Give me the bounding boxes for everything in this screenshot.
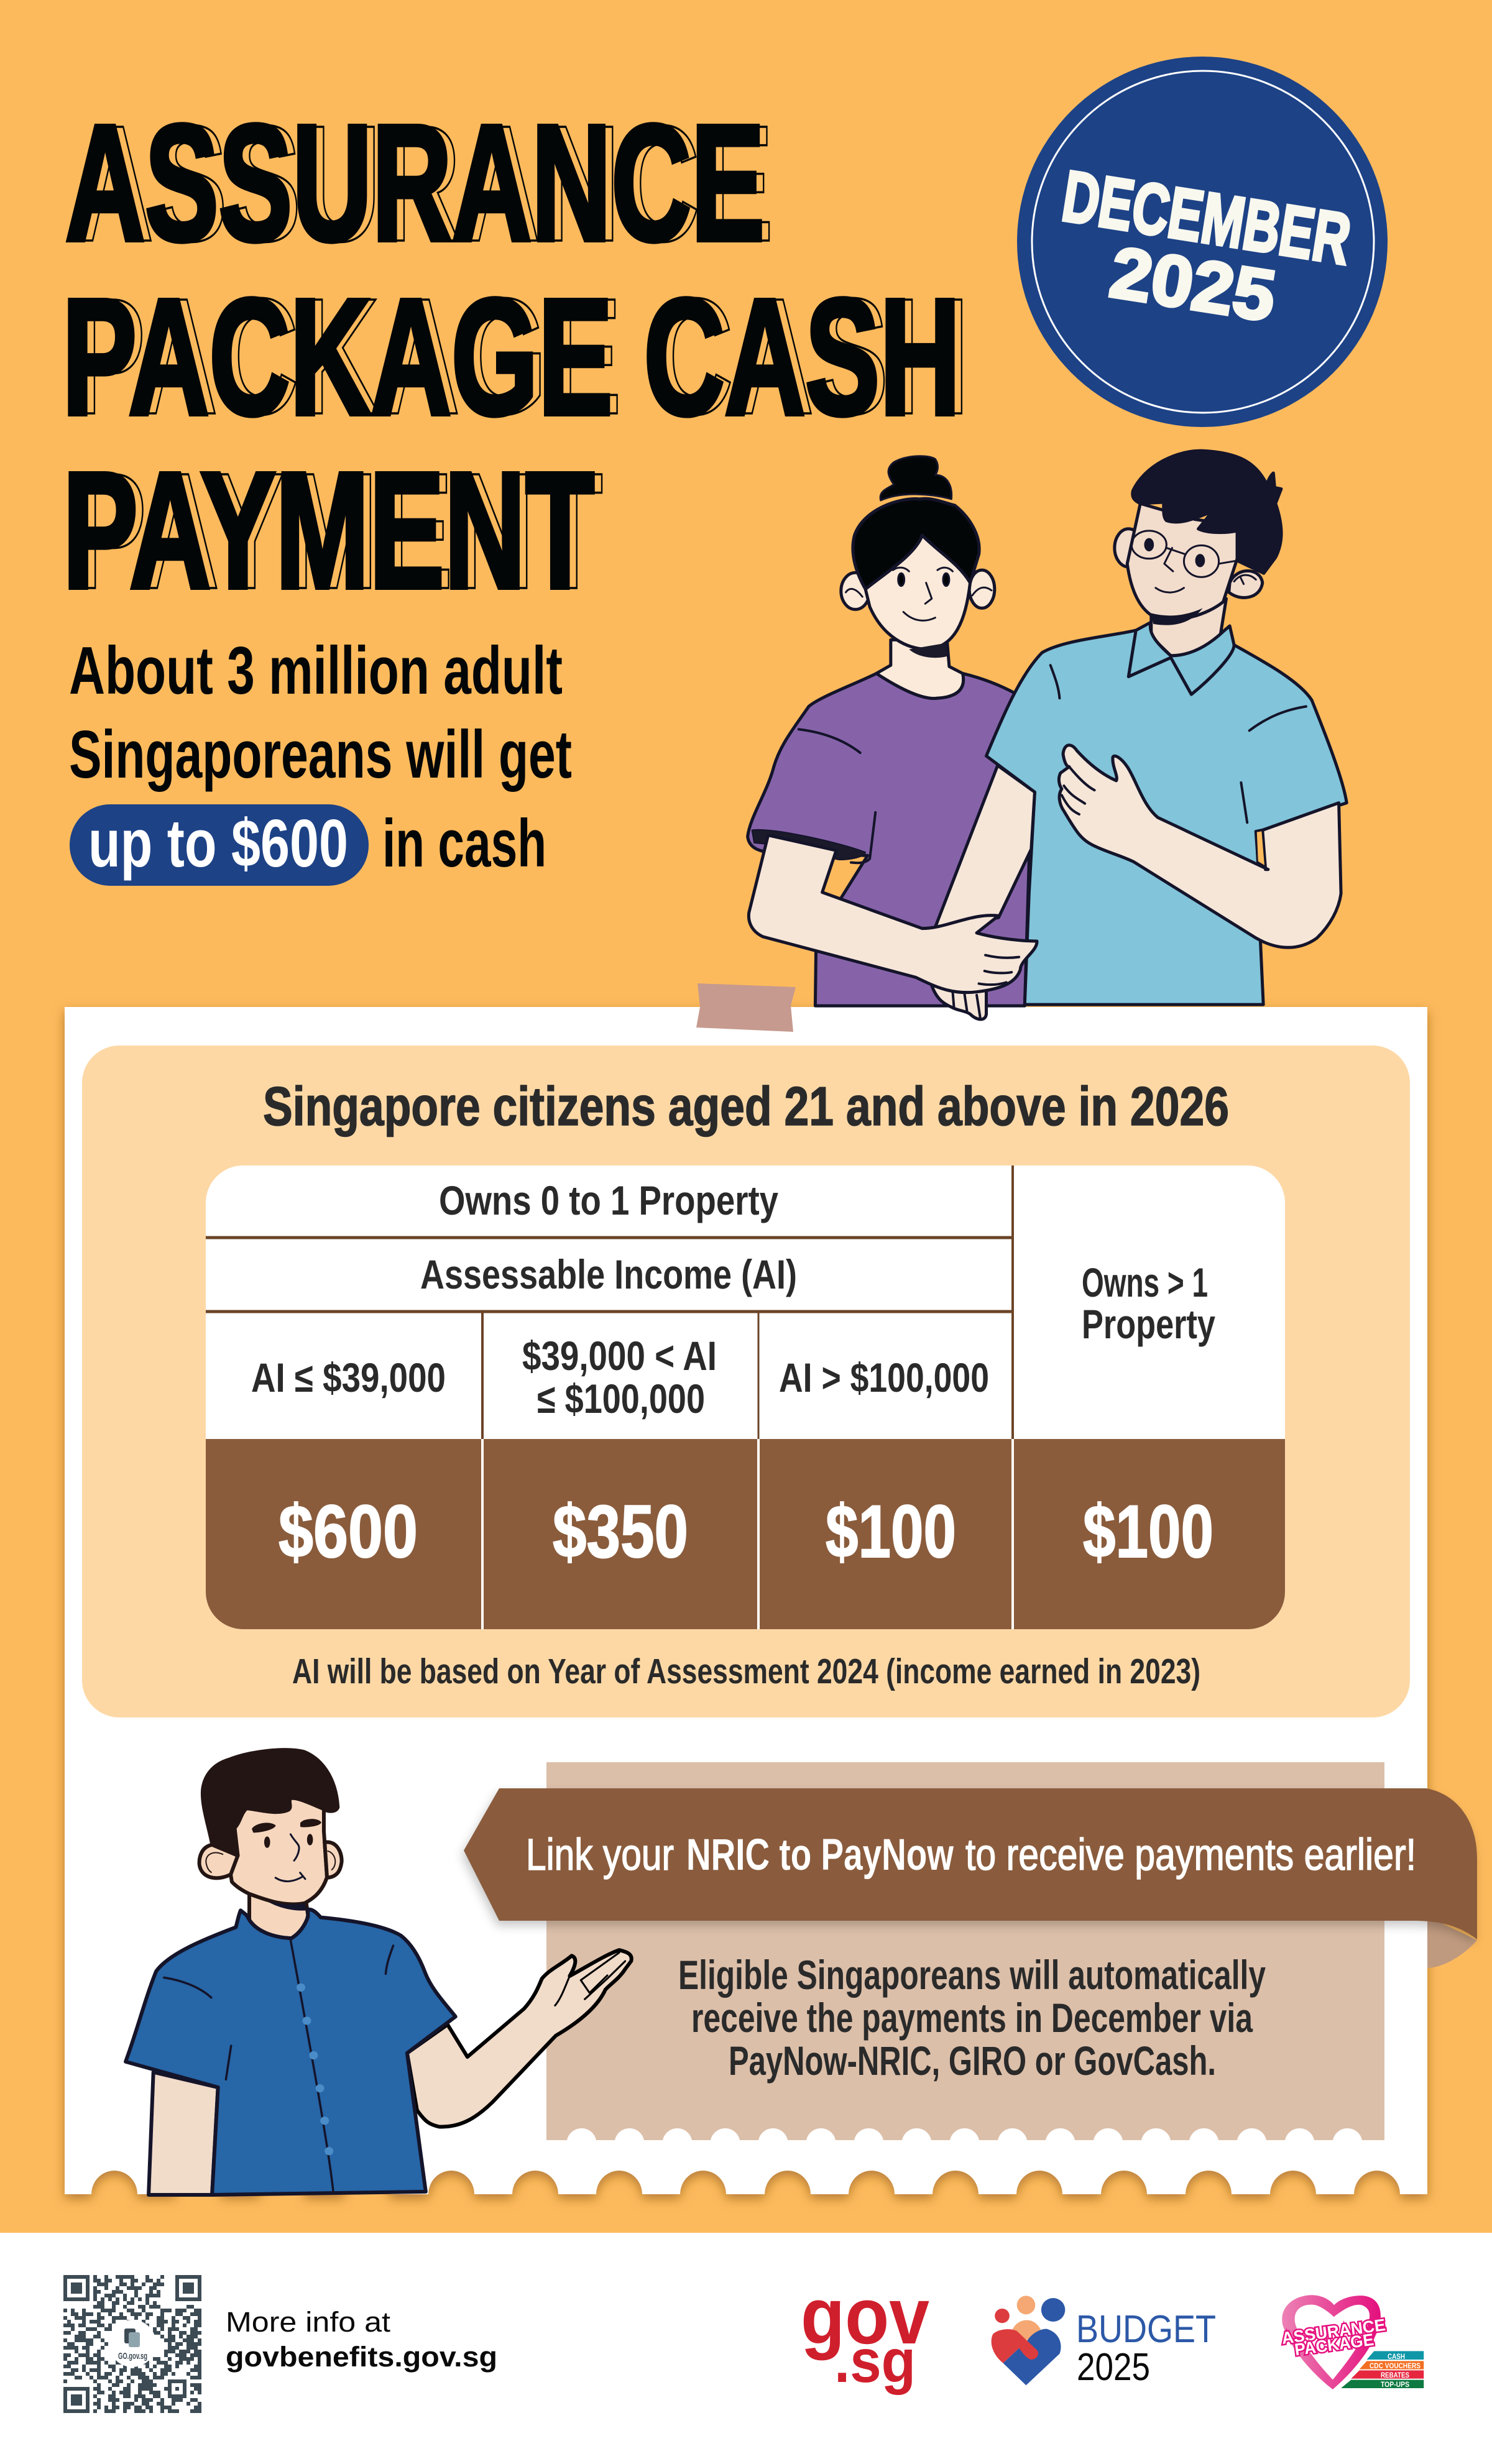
table [206, 1165, 1285, 1629]
man: shirt [987, 630, 1347, 1004]
shirt details [164, 1940, 394, 2192]
ears [200, 1842, 342, 1878]
logo: gov.sg [801, 2271, 929, 2395]
logo: assurance package: CDC VOUCHERS [1370, 2361, 1421, 2370]
man: left ear [1115, 529, 1143, 567]
title: ASSURANCE [65, 91, 765, 275]
table: Assessable Income (AI) [420, 1251, 797, 1297]
shirt [126, 1910, 456, 2195]
man: neck [1151, 599, 1227, 656]
ribbon callout: Link your [526, 1831, 674, 1880]
title: ASSURANCE [74, 91, 773, 276]
logo: assurance package: ASSURANCE [1281, 2315, 1386, 2348]
logo: assurance package [1281, 2295, 1424, 2389]
face [231, 1798, 327, 1904]
title: PAYMENT [71, 439, 603, 623]
table: Owns 0 to 1 Property [439, 1177, 778, 1223]
logo: assurance package: CASH [1388, 2352, 1405, 2361]
ribbon callout [464, 1788, 1477, 1968]
subtitle text: up to $600 [88, 806, 348, 881]
more info text: More info at [226, 2306, 391, 2338]
woman: fingers [932, 985, 987, 1019]
woman: chin shadow [909, 643, 947, 658]
buttons [297, 1984, 333, 2155]
title [62, 91, 969, 623]
table: Property [1082, 1301, 1215, 1347]
woman: neck [877, 640, 964, 699]
QR centre logo: GO.gov.sg [118, 2351, 147, 2361]
left arm [149, 2072, 218, 2195]
table: $39,000 < AI [522, 1333, 717, 1379]
more info text: govbenefits.gov.sg [226, 2341, 497, 2373]
ribbon callout: to receive payments earlier! [965, 1831, 1416, 1880]
tan note panel [546, 1762, 1384, 2140]
neck [249, 1887, 308, 1938]
note text: receive the payments in December via [691, 1995, 1253, 2041]
subtitle text: in cash [382, 806, 546, 881]
white card with scalloped edge [65, 1007, 1427, 2194]
QR code [63, 2275, 201, 2413]
man: chin shadow [1151, 608, 1203, 625]
man pointing illustration [126, 1750, 632, 2195]
subtitle text [69, 633, 572, 886]
logo: budget 2025 [992, 2296, 1216, 2389]
QR centre logo [109, 2320, 156, 2367]
panel heading: Singapore citizens aged 21 and above in 2026 [263, 1075, 1229, 1137]
note text: PayNow-NRIC, GIRO or GovCash. [729, 2038, 1216, 2084]
logo: assurance package: REBATES [1381, 2371, 1409, 2379]
peach panel: eligibility [82, 1046, 1410, 1717]
logo: gov.sg: gov [801, 2271, 929, 2361]
logo: budget 2025: BUDGET [1076, 2308, 1216, 2351]
table: Owns > 1 [1082, 1259, 1208, 1305]
man: raised arm [1059, 745, 1341, 947]
woman: bun [880, 456, 952, 500]
woman: ears [841, 570, 995, 609]
table: $350 [553, 1490, 688, 1573]
table: $100 [1083, 1490, 1213, 1573]
tape [696, 983, 796, 1032]
man: face [1127, 503, 1238, 620]
date badge: 2025 [1105, 231, 1281, 337]
footer band [0, 2233, 1492, 2464]
logo: gov.sg: .sg [834, 2327, 916, 2395]
facial features [252, 1819, 321, 1847]
hair [203, 1750, 338, 1855]
chin shadow [267, 1901, 306, 1911]
logo: assurance package: TOP-UPS [1381, 2380, 1409, 2389]
woman: sleeve shade [752, 830, 865, 860]
couple illustration [748, 451, 1347, 1019]
date badge [1017, 57, 1388, 427]
footnote: AI will be based on Year of Assessment 2024 (income earned in 2023) [292, 1652, 1200, 1691]
woman: arm and hand [748, 835, 1037, 993]
more info text [226, 2306, 497, 2373]
ribbon callout: NRIC to PayNow [686, 1831, 954, 1880]
note text: Eligible Singaporeans will automatically [678, 1952, 1266, 1998]
table: ≤ $100,000 [537, 1376, 705, 1422]
man: hair [1133, 451, 1281, 573]
logo: budget 2025: 2025 [1077, 2346, 1150, 2389]
table: AI ≤ $39,000 [251, 1354, 446, 1400]
table: $100 [826, 1490, 956, 1573]
table: $600 [279, 1490, 418, 1573]
man: glasses and features [1131, 531, 1238, 592]
title: PAYMENT [63, 438, 594, 623]
logo: assurance package: PACKAGE [1294, 2330, 1375, 2359]
note text [678, 1952, 1266, 2084]
woman: face features [846, 568, 992, 620]
woman: shirt [748, 673, 1029, 1006]
title: PACKAGE CASH [71, 264, 969, 449]
subtitle text: Singaporeans will get [69, 717, 572, 793]
date badge: DECEMBER [1057, 155, 1356, 280]
right arm and hand [407, 1950, 632, 2126]
man: forearm behind woman's hand [935, 765, 1034, 927]
woman: hair [853, 499, 979, 589]
title: PACKAGE CASH [62, 265, 960, 449]
man: right ear [1229, 571, 1263, 597]
subtitle text: About 3 million adult [69, 633, 563, 709]
man: collar [1128, 622, 1234, 694]
table: AI > $100,000 [779, 1354, 989, 1400]
woman: face [865, 535, 970, 650]
